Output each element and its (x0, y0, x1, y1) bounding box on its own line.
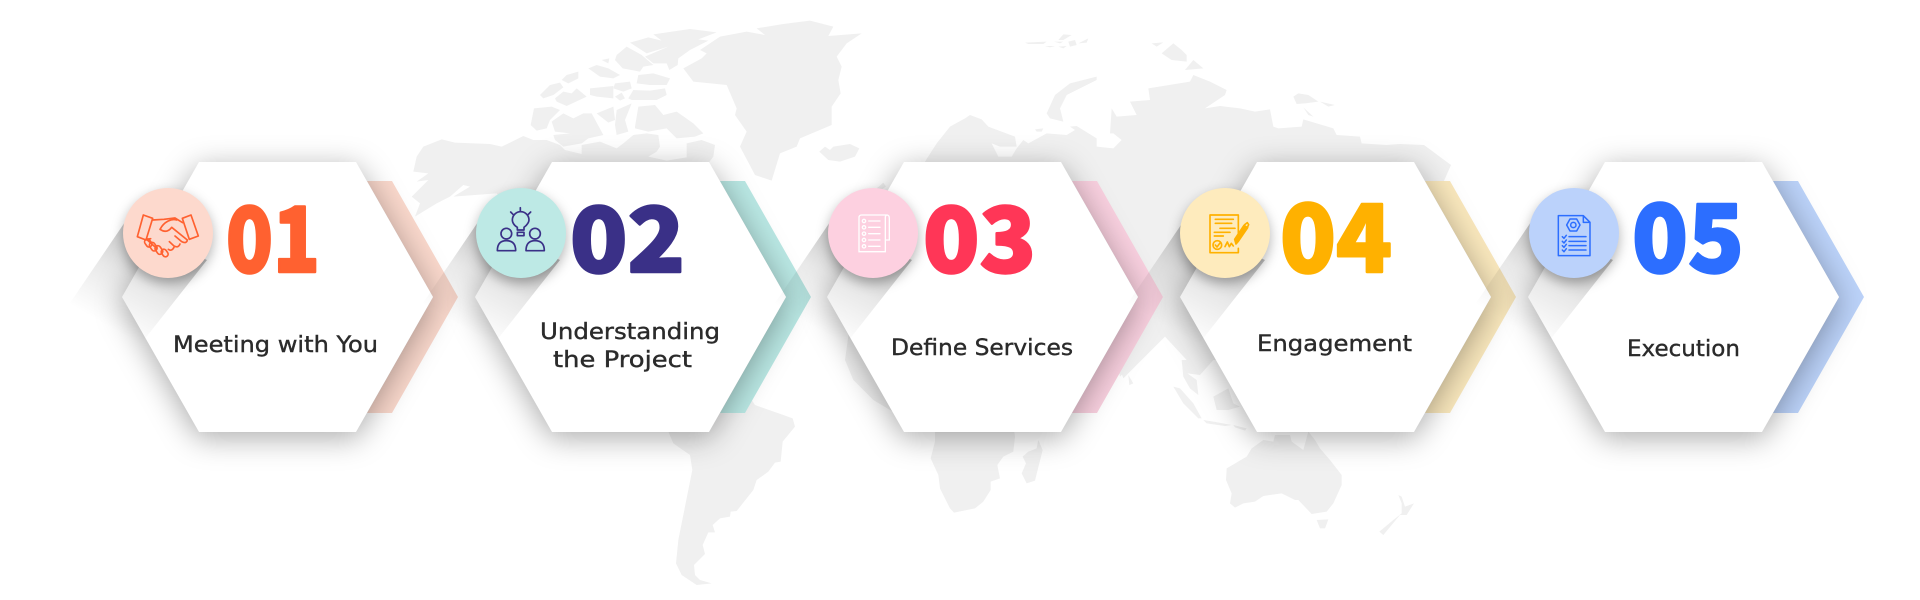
long shadow 3 (775, 222, 912, 345)
circle shadow 5 (1529, 193, 1619, 283)
icon circle 4 (1180, 188, 1270, 278)
world map background (412, 21, 1451, 585)
icon circle 2 (476, 188, 566, 278)
label: Engagement (1257, 331, 1412, 357)
hexagon 5 (1528, 162, 1839, 432)
label: Meeting with You (173, 332, 378, 358)
label: the Project (553, 347, 692, 373)
hexagon shadow 5 (1528, 168, 1839, 438)
Australia and South-East Asia (1117, 360, 1414, 535)
circle shadow 1 (123, 193, 213, 283)
long shadow 1 (70, 222, 207, 345)
long shadow 5 (1476, 222, 1613, 345)
step 3: Define Services (775, 162, 1163, 438)
step 4: Engagement (1128, 162, 1516, 438)
icon: settings document (1558, 216, 1590, 256)
hexagon shadow 3 (827, 168, 1138, 438)
icon: signed contract (1210, 215, 1249, 253)
number 01: 01 (226, 168, 320, 298)
label (540, 319, 720, 373)
chevron 1 (367, 181, 458, 413)
hexagon shadow 1 (122, 168, 433, 438)
hexagon 3 (827, 162, 1138, 432)
label: Understanding (540, 319, 720, 345)
North America and Arctic Canada (412, 21, 886, 300)
circle shadow 4 (1180, 193, 1270, 283)
icon: people with lightbulb (497, 208, 544, 251)
hexagon 2 (475, 162, 786, 432)
icon: handshake (137, 215, 198, 258)
label: Define Services (891, 335, 1073, 361)
hexagon 1 (122, 162, 433, 432)
chevron 2 (720, 181, 811, 413)
number 05: 05 (1632, 164, 1744, 300)
long shadow 4 (1128, 222, 1265, 345)
number 04: 04 (1280, 164, 1392, 300)
step 1: Meeting with You (70, 162, 458, 438)
label: Execution (1627, 336, 1740, 362)
number 02: 02 (570, 168, 685, 298)
circle shadow 2 (476, 193, 566, 283)
icon: checklist document (859, 215, 889, 252)
icon circle 3 (828, 188, 918, 278)
step 2: Understanding the Project (423, 162, 811, 438)
chevron 5 (1773, 181, 1864, 413)
icon circle 1 (123, 188, 213, 278)
Eurasia (925, 34, 1451, 378)
number 03: 03 (923, 168, 1036, 298)
step 5: Execution (1476, 162, 1864, 438)
hexagon shadow 2 (475, 168, 786, 438)
hexagon 4 (1180, 162, 1491, 432)
chevron 4 (1425, 181, 1516, 413)
hexagon shadow 4 (1180, 168, 1491, 438)
chevron 3 (1072, 181, 1163, 413)
icon circle 5 (1529, 188, 1619, 278)
long shadow 2 (423, 222, 560, 345)
South America and Africa (668, 300, 1043, 585)
circle shadow 3 (828, 193, 918, 283)
